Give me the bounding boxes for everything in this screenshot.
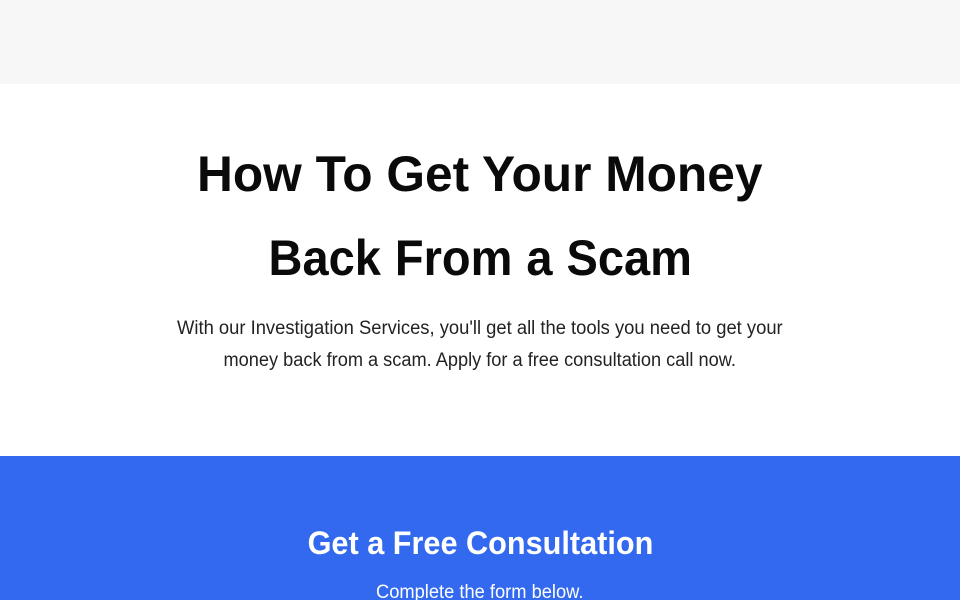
title — [197, 146, 763, 286]
intro text: With our Investigation Services, you'll get all the tools you need to get your — [177, 318, 783, 339]
top grey band — [0, 0, 960, 84]
title: How To Get Your Money — [197, 146, 763, 202]
intro text — [177, 318, 783, 371]
title: Back From a Scam — [268, 230, 692, 286]
consultation heading: Get a Free Consultation — [307, 525, 653, 561]
panel: blue consultation section — [0, 456, 960, 600]
intro text: money back from a scam. Apply for a free consultation call now. — [224, 350, 736, 371]
